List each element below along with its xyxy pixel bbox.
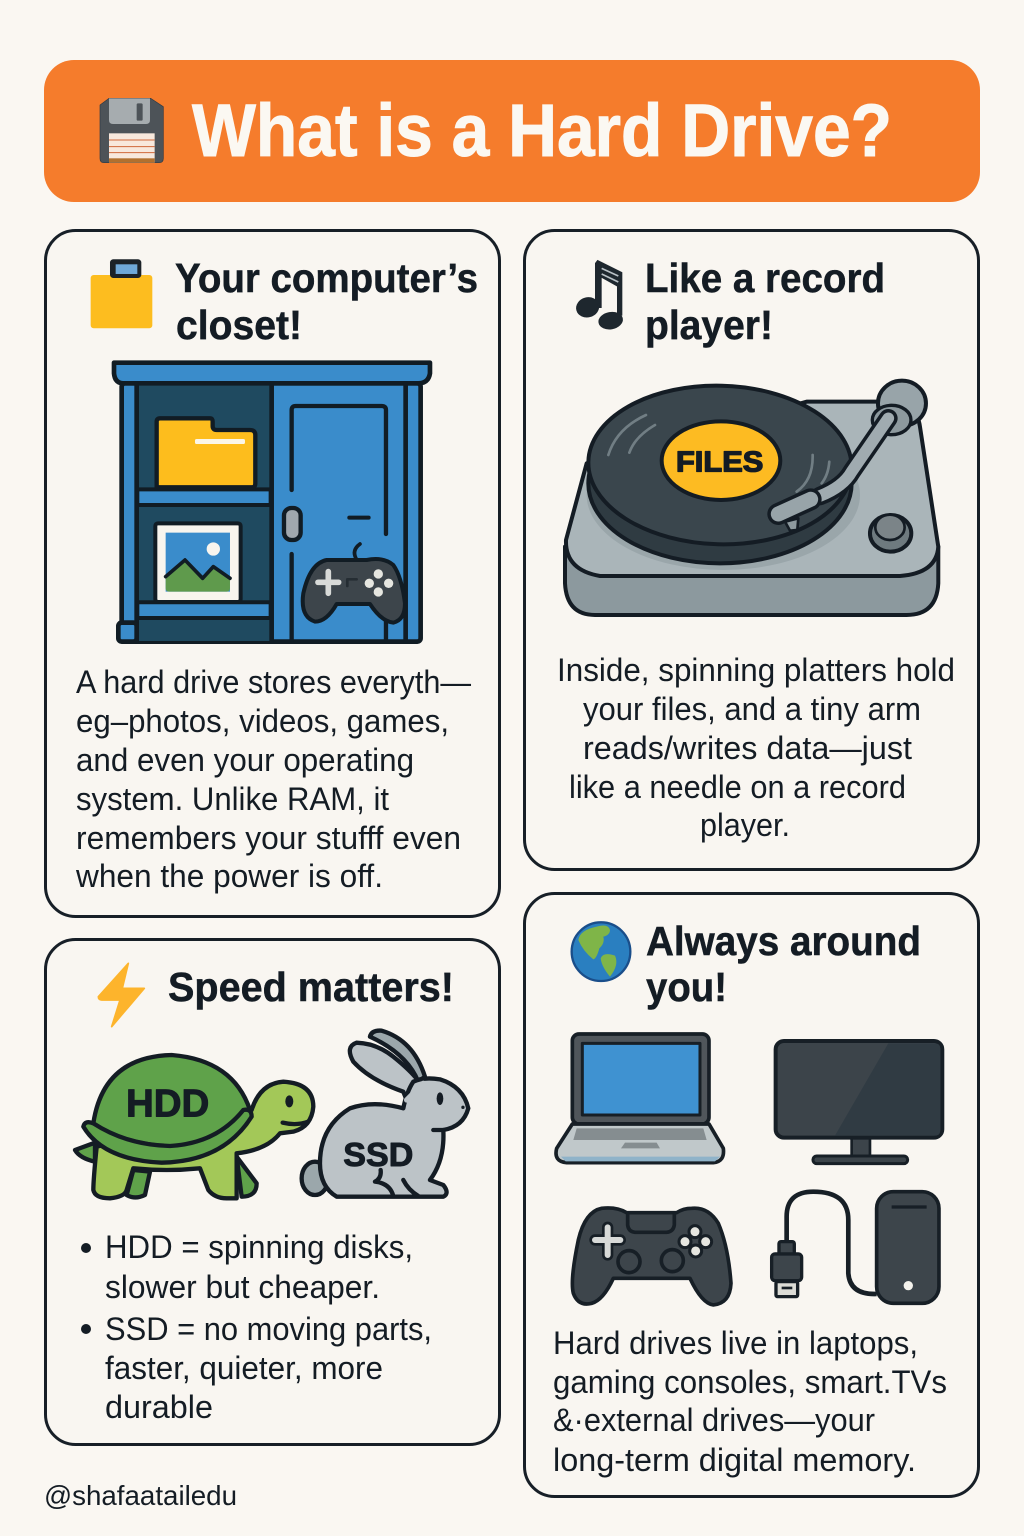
heading: always around you: you!	[646, 964, 727, 1010]
body text: record player: reads/writes data—just	[583, 730, 912, 766]
game controller	[303, 544, 405, 623]
panel: record player	[524, 230, 978, 870]
icon: music notes	[575, 261, 624, 331]
title banner	[44, 60, 980, 202]
body text: closet	[75, 664, 471, 894]
heading: your computer's closet: Your computer’s	[175, 255, 478, 301]
body text: closet: system. Unlike RAM, it	[76, 781, 389, 817]
heading: like a record player	[645, 255, 885, 348]
icon: external drive with USB cable	[772, 1192, 939, 1303]
icon: lightning bolt	[98, 963, 144, 1027]
bullet list: HDD vs SSD: faster, quieter, more	[105, 1350, 383, 1386]
body text: record player: your files, and a tiny arm	[583, 691, 921, 727]
body text: always around you	[553, 1325, 947, 1478]
icon: laptop	[556, 1034, 724, 1163]
panel: always around you	[524, 894, 978, 1496]
icon: globe	[572, 922, 630, 981]
illustration: rabbit SSD: SSD	[343, 1137, 413, 1174]
body text: closet: eg–photos, videos, games,	[76, 703, 449, 739]
illustration: turtle HDD	[75, 1055, 313, 1198]
heading: speed matters: Speed matters!	[168, 964, 454, 1010]
record label	[662, 421, 780, 500]
bullet list: HDD vs SSD: HDD = spinning disks,	[105, 1229, 413, 1265]
panel: computer's closet	[46, 230, 500, 916]
body text: always around you: Hard drives live in laptops,	[553, 1325, 918, 1361]
bullet list: HDD vs SSD: slower but cheaper.	[105, 1269, 380, 1305]
heading: like a record player: player!	[645, 302, 773, 348]
bullet list: HDD vs SSD: SSD = no moving parts,	[105, 1311, 432, 1347]
footer handle: @shafaatailedu	[44, 1480, 237, 1511]
body text: closet: A hard drive stores everyth—	[76, 664, 471, 700]
panel: speed matters	[46, 940, 500, 1444]
icon: monitor	[776, 1041, 942, 1164]
knob	[870, 515, 911, 552]
body text: record player: Inside, spinning platters hold	[557, 652, 955, 688]
heading: always around you: Always around	[646, 918, 921, 964]
title text: What is a Hard Drive?	[192, 89, 892, 172]
body text: always around you: long-term digital memory.	[553, 1442, 916, 1478]
illustration: rabbit SSD	[302, 1031, 468, 1197]
heading: like a record player: Like a record	[645, 255, 885, 301]
illustration: turtle HDD: HDD	[126, 1083, 209, 1126]
bullet list: HDD vs SSD: durable	[105, 1389, 213, 1425]
body text: always around you: gaming consoles, smart.TVs	[553, 1364, 947, 1400]
heading: always around you	[646, 918, 921, 1010]
body text: record player: player.	[700, 807, 790, 843]
body text: record player	[557, 652, 955, 843]
heading: your computer's closet	[175, 255, 478, 348]
body text: closet: remembers your stufff even	[76, 820, 461, 856]
body text: closet: when the power is off.	[75, 858, 383, 894]
illustration: turntable	[565, 381, 938, 615]
tonearm	[778, 381, 926, 531]
illustration: wardrobe	[114, 363, 430, 642]
body text: always around you: &·external drives—your	[553, 1402, 875, 1438]
heading: your computer's closet: closet!	[176, 302, 302, 348]
icon: closet emoji	[91, 259, 152, 328]
body text: record player: like a needle on a record	[569, 769, 906, 805]
body text: closet: and even your operating	[76, 742, 414, 778]
folder	[157, 418, 255, 487]
icon: floppy disk	[100, 98, 163, 163]
bullet list: HDD vs SSD	[81, 1229, 432, 1425]
picture frame	[155, 523, 241, 602]
icon: game controller	[572, 1208, 731, 1305]
record label: FILES	[676, 447, 763, 479]
